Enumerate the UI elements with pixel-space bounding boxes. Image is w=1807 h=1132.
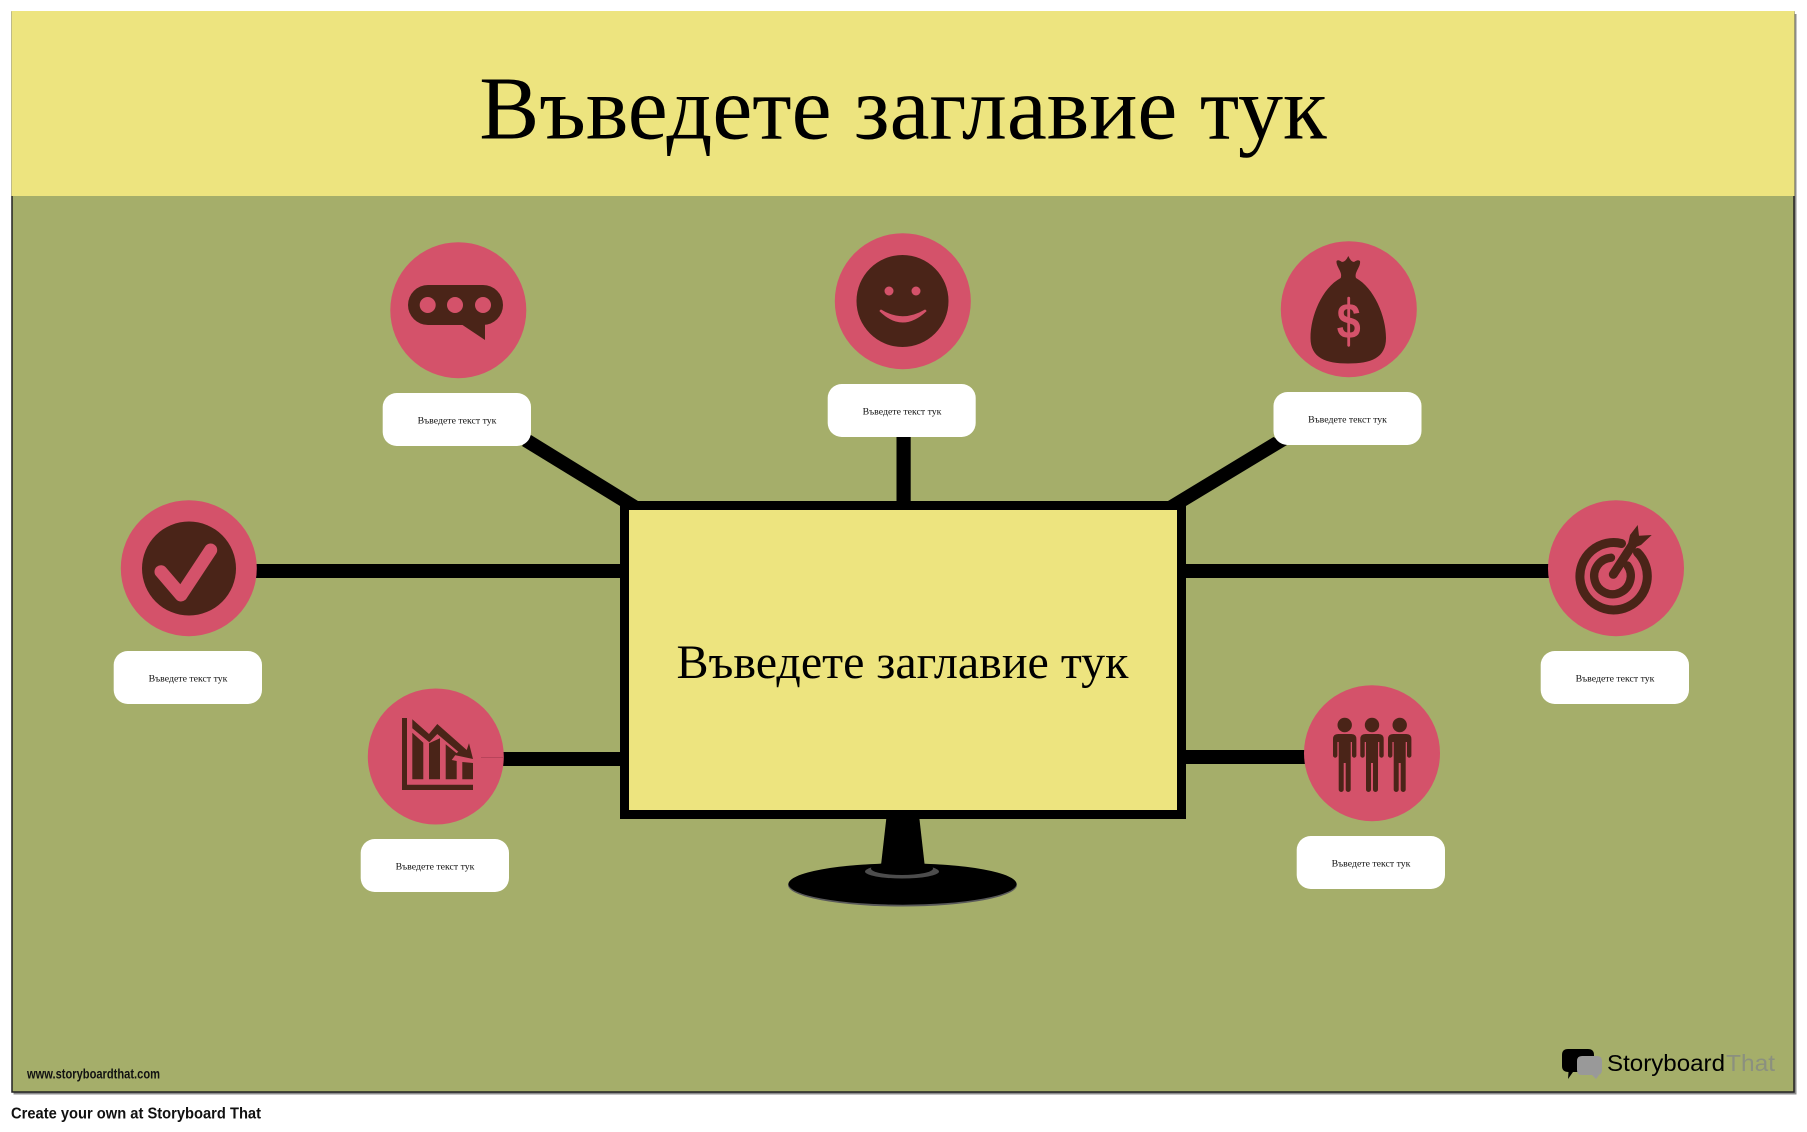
footer credit: Create your own at Storyboard That <box>11 1106 262 1122</box>
text box: Въведете текст тук <box>1576 673 1655 684</box>
text box <box>114 651 262 704</box>
icon: target with arrow <box>1548 500 1684 636</box>
website url: www.storyboardthat.com <box>26 1066 160 1082</box>
monitor screen <box>624 506 1182 814</box>
text box <box>1297 836 1445 889</box>
icon: three people <box>1304 685 1440 821</box>
icon: check mark <box>121 500 257 636</box>
text box <box>1541 651 1689 704</box>
icon: declining bar chart <box>368 688 504 824</box>
connector lines <box>250 435 1550 766</box>
item: money <box>1274 241 1422 445</box>
text box: Въведете текст тук <box>1332 858 1411 869</box>
logo: Storyboard That: That <box>1726 1050 1776 1076</box>
central monitor <box>624 506 1182 906</box>
item: smile <box>828 233 976 437</box>
icon: speech bubble <box>390 242 526 378</box>
title: Въведете заглавие тук <box>479 60 1327 158</box>
logo: Storyboard That: Storyboard <box>1607 1050 1725 1076</box>
item: chart <box>361 688 509 892</box>
item: people <box>1297 685 1445 889</box>
item: check <box>114 500 262 704</box>
text box <box>1274 392 1422 445</box>
text box: Въведете текст тук <box>863 406 942 417</box>
monitor stand <box>788 815 1017 906</box>
text box <box>828 384 976 437</box>
icon: money bag <box>1281 241 1417 377</box>
item: chat <box>383 242 531 446</box>
text box <box>361 839 509 892</box>
icon: smiley face <box>835 233 971 369</box>
central title: Въведете заглавие тук <box>676 636 1129 689</box>
text box: Въведете текст тук <box>396 861 475 872</box>
text box: Въведете текст тук <box>418 415 497 426</box>
item: target <box>1541 500 1689 704</box>
text box <box>383 393 531 446</box>
text box: Въведете текст тук <box>149 673 228 684</box>
title banner <box>12 11 1794 196</box>
icon: money bag: $ <box>1337 293 1361 349</box>
text box: Въведете текст тук <box>1308 414 1387 425</box>
logo: Storyboard That <box>1562 1049 1776 1079</box>
